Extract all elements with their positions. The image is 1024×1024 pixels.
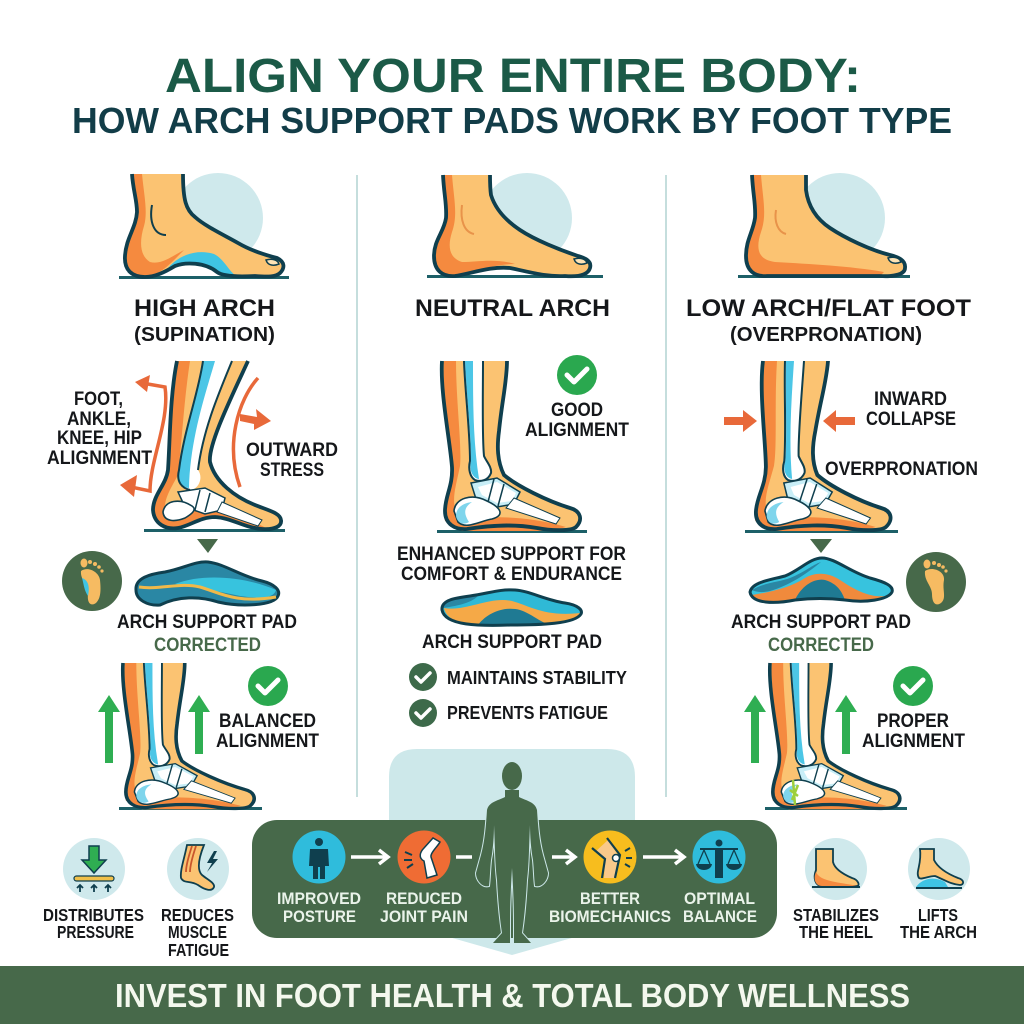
label: foot ankle knee hip alignment: ALIGNMENT — [47, 448, 152, 469]
icon: foot badge — [62, 551, 122, 611]
heading: low arch: LOW ARCH/FLAT FOOT — [686, 295, 971, 322]
panel: body backdrop — [389, 749, 635, 955]
label: arch support pad corrected: ARCH SUPPORT PAD — [731, 612, 911, 633]
label: good alignment: ALIGNMENT — [525, 420, 629, 441]
label: outward stress: STRESS — [260, 460, 324, 481]
heading: high arch: (SUPINATION) — [134, 324, 275, 346]
neutral leg — [437, 361, 587, 533]
label: arch support pad: ARCH SUPPORT PAD — [422, 632, 602, 653]
label: inward collapse — [866, 389, 956, 430]
arch support pad — [136, 562, 279, 605]
labels: benefits — [277, 890, 757, 926]
panel: benefits bar — [252, 820, 777, 938]
label: foot ankle knee hip alignment — [47, 389, 152, 469]
arrow: down triangle — [810, 539, 832, 553]
leg with misalignment — [144, 361, 285, 532]
corrected leg — [119, 663, 262, 810]
icon: flat foot — [738, 173, 910, 278]
icon: high arch foot — [119, 173, 289, 279]
icon: improved posture — [292, 830, 346, 884]
benefit: prevents fatigue — [409, 699, 608, 727]
labels: benefits: IMPROVED — [277, 890, 361, 908]
heading: low arch — [686, 295, 971, 346]
label: distributes pressure — [43, 905, 144, 942]
panel: high arch — [47, 173, 338, 810]
text: enhanced support: COMFORT & ENDURANCE — [401, 564, 622, 585]
label: good alignment: GOOD — [551, 400, 603, 421]
icon: optimal balance — [692, 830, 746, 884]
panel: low arch — [686, 173, 978, 810]
benefit: maintains stability — [409, 663, 627, 691]
label: stabilizes the heel: STABILIZES — [793, 905, 879, 925]
label: arch support pad corrected — [117, 612, 297, 656]
label: balanced alignment: ALIGNMENT — [216, 731, 319, 752]
label: reduces muscle fatigue: FATIGUE — [168, 940, 229, 960]
label: balanced alignment — [216, 711, 319, 752]
arrows: green up — [98, 695, 210, 763]
label: lifts the arch: LIFTS — [918, 905, 958, 925]
arrows: alignment bracket — [120, 375, 166, 497]
heading: high arch — [134, 295, 275, 346]
panel: neutral arch — [397, 173, 629, 727]
label: overpronation: OVERPRONATION — [825, 459, 978, 480]
labels: benefits: BETTER — [580, 890, 640, 908]
icon: check — [557, 355, 597, 395]
arch support pad — [442, 590, 581, 626]
arrows: inward collapse — [724, 410, 855, 432]
icon: lifts the arch — [908, 838, 970, 900]
arrows: green up — [744, 695, 857, 763]
arrow — [643, 850, 684, 864]
labels: benefits: OPTIMAL — [684, 890, 755, 908]
icon: stabilizes the heel — [805, 838, 867, 900]
label: distributes pressure: PRESSURE — [57, 922, 134, 942]
title — [72, 50, 952, 141]
icon: foot badge — [906, 552, 966, 612]
label: foot ankle knee hip alignment: KNEE, HIP — [57, 428, 142, 449]
arch support pad — [750, 558, 892, 602]
labels: benefits: BALANCE — [683, 908, 757, 926]
text: enhanced support: ENHANCED SUPPORT FOR — [397, 544, 626, 565]
label: inward collapse: INWARD — [874, 389, 947, 410]
footer banner — [0, 966, 1024, 1024]
label: reduces muscle fatigue — [161, 905, 234, 960]
labels: benefits: REDUCED — [386, 890, 462, 908]
icon: reduces muscle fatigue — [167, 838, 229, 900]
footer banner: INVEST IN FOOT HEALTH & TOTAL BODY WELLNESS — [115, 977, 910, 1014]
icon: distributes pressure — [63, 838, 125, 900]
icon: check — [893, 666, 933, 706]
heading: high arch: HIGH ARCH — [134, 295, 275, 322]
corrected leg — [765, 663, 907, 810]
overpronated leg — [745, 361, 901, 533]
arrow — [456, 855, 472, 859]
labels: benefits: JOINT PAIN — [380, 908, 468, 926]
label: foot ankle knee hip alignment: FOOT, — [74, 389, 123, 410]
label: arch support pad corrected: ARCH SUPPORT PAD — [117, 612, 297, 633]
label: proper alignment: PROPER — [877, 711, 949, 732]
label: balanced alignment: BALANCED — [219, 711, 316, 732]
benefit: prevents fatigue: PREVENTS FATIGUE — [447, 703, 608, 723]
label: stabilizes the heel: THE HEEL — [799, 922, 873, 942]
label: distributes pressure: DISTRIBUTES — [43, 905, 144, 925]
label: good alignment — [525, 400, 629, 441]
label: outward stress: OUTWARD — [246, 440, 338, 461]
label: outward stress — [246, 440, 338, 481]
label: lifts the arch: THE ARCH — [900, 922, 977, 942]
label: arch support pad corrected: CORRECTED — [154, 635, 261, 656]
title: HOW ARCH SUPPORT PADS WORK BY FOOT TYPE — [72, 100, 952, 141]
arrow — [351, 850, 388, 864]
icon: better biomechanics — [584, 830, 636, 884]
labels: benefits: POSTURE — [283, 908, 356, 926]
heading: low arch: (OVERPRONATION) — [730, 324, 922, 346]
arrow: down triangle — [197, 539, 218, 553]
label: reduces muscle fatigue: MUSCLE — [168, 922, 227, 942]
title: ALIGN YOUR ENTIRE BODY: — [165, 50, 861, 103]
icon: reduced joint pain — [398, 830, 450, 884]
icon: neutral foot — [427, 173, 603, 278]
label: reduces muscle fatigue: REDUCES — [161, 905, 234, 925]
label: stabilizes the heel — [793, 905, 879, 942]
label: arch support pad corrected — [731, 612, 911, 656]
label: proper alignment — [862, 711, 965, 752]
text: enhanced support — [397, 544, 626, 585]
label: lifts the arch — [900, 905, 977, 942]
label: foot ankle knee hip alignment: ANKLE, — [67, 409, 131, 430]
icon: human figure — [476, 762, 548, 943]
label: arch support pad corrected: CORRECTED — [768, 635, 874, 656]
labels: benefits: BIOMECHANICS — [549, 908, 671, 926]
label: inward collapse: COLLAPSE — [866, 409, 956, 430]
arrow: outward stress — [233, 378, 271, 487]
label: proper alignment: ALIGNMENT — [862, 731, 965, 752]
heading: neutral arch: NEUTRAL ARCH — [415, 295, 610, 322]
arrow — [552, 850, 575, 864]
icon: check — [248, 666, 288, 706]
benefit: maintains stability: MAINTAINS STABILITY — [447, 668, 627, 688]
